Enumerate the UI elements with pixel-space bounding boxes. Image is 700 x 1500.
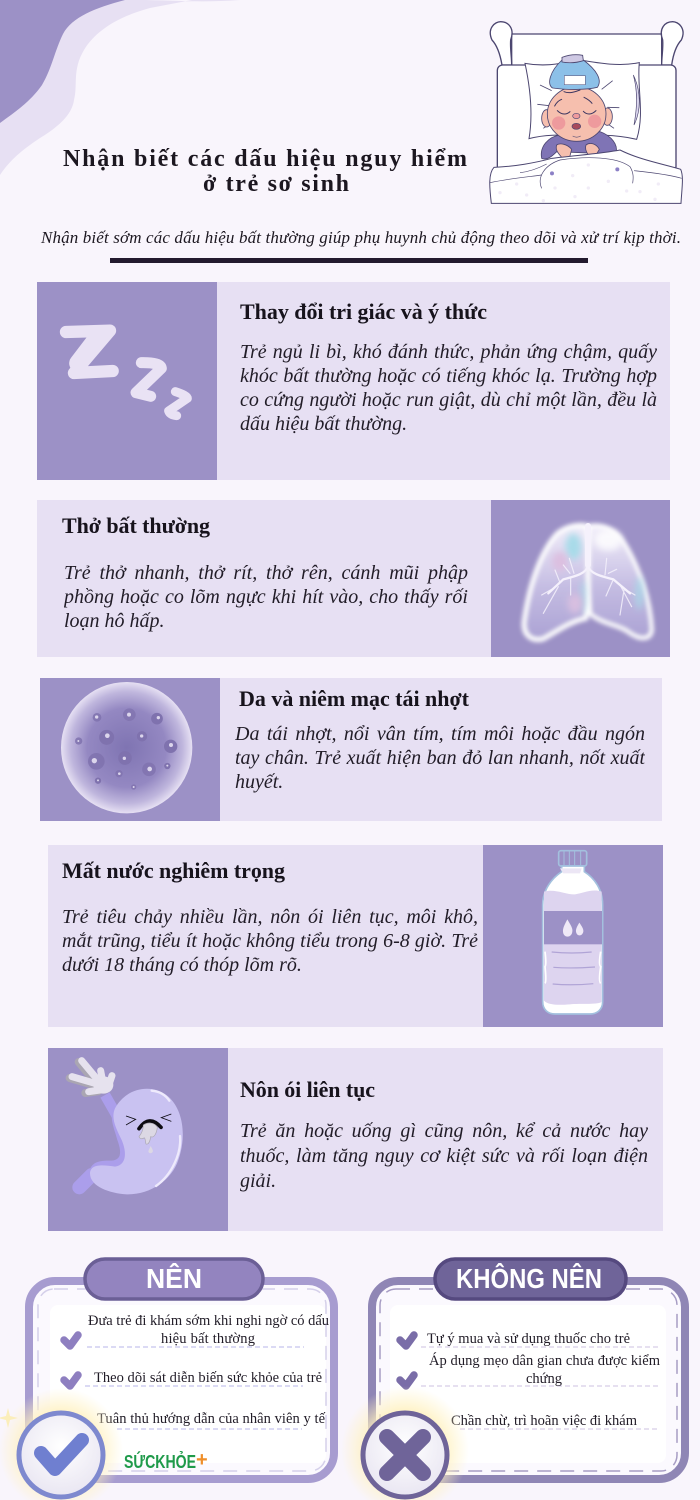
- logo: Sức Khỏe+: +: [196, 1449, 208, 1471]
- panel: altered consciousness: co cứng người hoặc run giật, dù chỉ một lần, đều là: [240, 389, 657, 411]
- panel: altered consciousness: Trẻ ngủ li bì, khó đánh thức, phản ứng chậm, quấy: [240, 341, 657, 363]
- icon: water bottle: [543, 851, 603, 1014]
- panel: severe dehydration: dưới 18 tháng có thóp lõm rõ.: [62, 954, 302, 976]
- panel: pale skin and mucosa: [40, 678, 662, 821]
- panel: pale skin and mucosa: Da tái nhợt, nổi vân tím, tím môi hoặc đầu ngón: [235, 723, 645, 745]
- panel: persistent vomiting: [48, 1048, 663, 1231]
- icon: skin spots: [61, 682, 192, 813]
- card: should not do: [341, 1259, 685, 1500]
- panel: persistent vomiting: thuốc, làm tăng nguy cơ kiệt sức và rối loạn điện: [240, 1145, 648, 1167]
- panel: abnormal breathing: Thở bất thường: [62, 513, 210, 538]
- panel: pale skin and mucosa: Da và niêm mạc tái nhợt: [239, 686, 470, 711]
- illustration: sick baby in bed: [490, 22, 683, 203]
- should-not list: Chần chừ, trì hoãn việc đi khám: [451, 1413, 638, 1429]
- panel: severe dehydration: Trẻ tiêu chảy nhiều lần, nôn ói liên tục, môi khô,: [62, 906, 478, 928]
- panel: altered consciousness: Thay đổi tri giác và ý thức: [240, 299, 487, 324]
- panel: severe dehydration: [48, 845, 663, 1027]
- panel: altered consciousness: khóc bất thường hoặc có tiếng khóc lạ. Trường hợp: [240, 365, 657, 387]
- decorative corner blob: [0, 0, 240, 175]
- panel: pale skin and mucosa: huyết.: [235, 771, 283, 793]
- card: should do: [0, 1259, 334, 1500]
- should-do list: Tuân thủ hướng dẫn của nhân viên y tế: [97, 1411, 326, 1427]
- panel: persistent vomiting: giải.: [240, 1170, 276, 1192]
- panel: severe dehydration: Mất nước nghiêm trọng: [62, 858, 285, 883]
- panel: pale skin and mucosa: tay chân. Trẻ xuất hiện ban đỏ lan nhanh, nốt xuất: [235, 747, 645, 769]
- panel: abnormal breathing: phồng hoặc co lõm ngực khi hít vào, cho thấy rối: [64, 586, 468, 608]
- panel: altered consciousness: [37, 282, 670, 480]
- should-do pill heading: NÊN: [146, 1263, 202, 1294]
- should-not pill heading: KHÔNG NÊN: [456, 1262, 602, 1294]
- panel: abnormal breathing: [37, 500, 670, 657]
- should-do list: hiệu bất thường: [161, 1331, 255, 1347]
- icon: sleeping Z letters: [66, 331, 187, 416]
- title: Nhận biết các dấu hiệu nguy hiểm: [63, 146, 467, 172]
- icon: vomiting stomach: [70, 1061, 183, 1194]
- should-do list: Theo dõi sát diễn biến sức khỏe của trẻ: [94, 1370, 322, 1386]
- panel: abnormal breathing: loạn hô hấp.: [64, 610, 165, 632]
- logo: Sức Khỏe+: SỨCKHỎE: [124, 1451, 196, 1472]
- title divider bar: [110, 258, 588, 263]
- title: ở trẻ sơ sinh: [203, 171, 349, 197]
- should-not list: chứng: [526, 1371, 562, 1387]
- subtitle: Nhận biết sớm các dấu hiệu bất thường giúp phụ huynh chủ động theo dõi và xử trí kịp thời.: [40, 228, 681, 247]
- icon: lungs: [524, 525, 652, 640]
- should-do pill heading: [85, 1259, 263, 1299]
- panel: abnormal breathing: Trẻ thở nhanh, thở rít, thở rên, cánh mũi phập: [64, 562, 468, 584]
- panel: persistent vomiting: Nôn ói liên tục: [240, 1077, 375, 1102]
- icon: cross badge: [341, 1386, 469, 1500]
- panel: altered consciousness: dấu hiệu bất thường.: [240, 413, 407, 435]
- panel: persistent vomiting: Trẻ ăn hoặc uống gì cũng nôn, kể cả nước hay: [240, 1120, 648, 1142]
- should-not list: Áp dụng mẹo dân gian chưa được kiểm: [429, 1352, 661, 1369]
- should-not list: Tự ý mua và sử dụng thuốc cho trẻ: [427, 1331, 630, 1347]
- should-do list: [64, 1313, 329, 1429]
- should-not list: [400, 1331, 661, 1429]
- title: [63, 146, 467, 197]
- should-do list: Đưa trẻ đi khám sớm khi nghi ngờ có dấu: [88, 1313, 329, 1329]
- panel: severe dehydration: mắt trũng, tiểu ít hoặc không tiểu trong 6-8 giờ. Trẻ: [62, 930, 478, 952]
- should-not pill heading: [435, 1259, 626, 1299]
- icon: check badge: [0, 1388, 123, 1500]
